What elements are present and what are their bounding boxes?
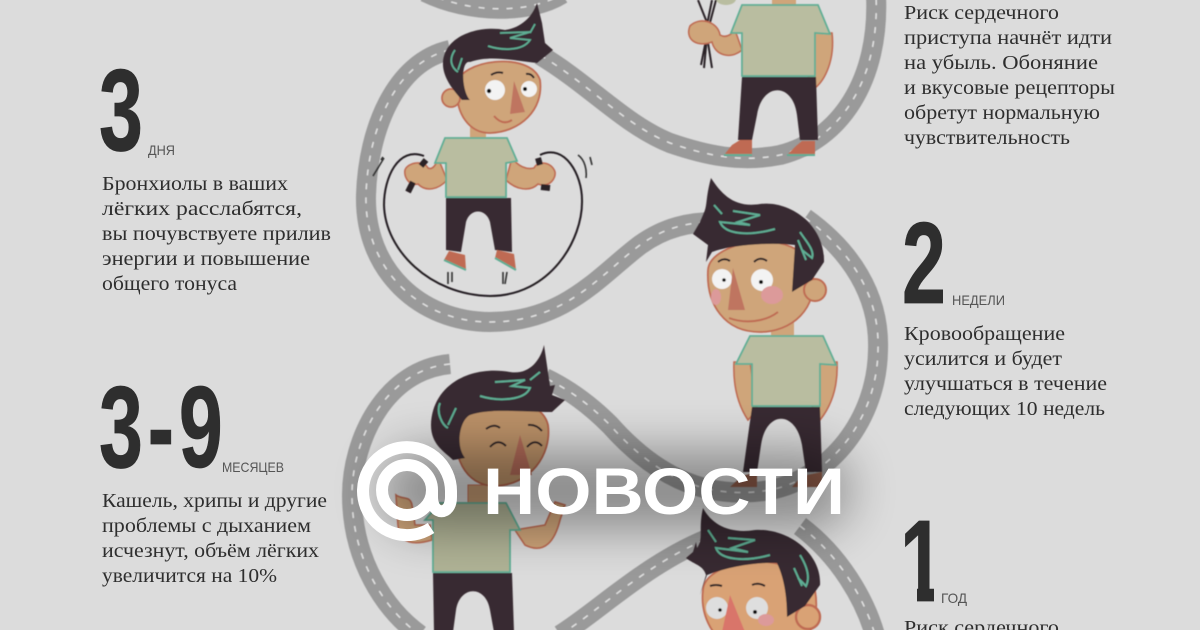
block: top right text: Риск сердечного <box>904 2 1059 24</box>
eyes <box>712 269 732 289</box>
head <box>703 562 816 630</box>
description: Кровообращение <box>904 323 1065 345</box>
shoes <box>724 140 815 155</box>
block: top right text: и вкусовые рецепторы <box>904 77 1115 99</box>
nose and mouth <box>510 81 525 114</box>
neck <box>470 125 486 145</box>
unit: НЕДЕЛИ <box>952 292 1005 308</box>
rope handles <box>408 158 550 192</box>
description <box>102 173 331 295</box>
block: 3-9 months <box>99 363 327 587</box>
head <box>457 61 540 133</box>
neck <box>468 485 490 507</box>
pants <box>433 573 514 630</box>
block: top right text <box>904 2 1115 149</box>
number 1: 1 <box>900 497 944 627</box>
block: top right text: на убыль. Обоняние <box>904 52 1098 74</box>
closed eyes <box>486 425 542 447</box>
right arm <box>808 33 833 88</box>
character: holding balloons <box>689 0 833 155</box>
unit: МЕСЯЦЕВ <box>222 459 284 475</box>
nose <box>722 595 745 630</box>
hair <box>693 178 824 292</box>
number 2: 2 <box>902 199 946 329</box>
balloon <box>716 0 736 5</box>
shirt <box>435 138 517 197</box>
block: top right text: чувствительность <box>904 127 1070 149</box>
hair <box>443 3 553 100</box>
icon: at sign <box>363 447 451 535</box>
cheek <box>758 614 774 626</box>
shirt <box>731 5 830 76</box>
character: one year <box>686 508 820 630</box>
description <box>904 323 1107 420</box>
arms <box>396 495 565 548</box>
eyes <box>706 597 728 619</box>
character: two weeks <box>693 178 837 487</box>
arms <box>734 362 837 420</box>
description: улучшаться в течение <box>904 373 1107 395</box>
description: усилится и будет <box>904 348 1062 370</box>
block: 2 weeks <box>902 199 1107 420</box>
nose and mouth <box>728 268 745 310</box>
block: top right text: обретут нормальную <box>904 102 1100 124</box>
description: лёгких расслабятся, <box>102 198 302 220</box>
shoes <box>444 250 516 270</box>
number 3-9: 3-9 <box>99 363 223 493</box>
neck <box>772 0 796 14</box>
description: Бронхиолы в ваших <box>102 173 288 195</box>
block: 1 year <box>904 520 1058 630</box>
nose <box>510 435 532 475</box>
arms and fists <box>405 158 555 189</box>
hair <box>686 508 820 617</box>
description: вы почувствуете прилив <box>102 223 331 245</box>
head <box>456 400 548 486</box>
neck <box>771 322 794 342</box>
jump rope <box>384 152 582 296</box>
description <box>102 490 327 587</box>
block: 3 days <box>99 46 331 295</box>
description: проблемы с дыханием <box>102 515 311 537</box>
description: энергии и повышение <box>102 248 310 270</box>
shirt <box>425 503 520 572</box>
description: следующих 10 недель <box>904 398 1105 420</box>
number 3: 3 <box>99 46 143 176</box>
motion marks <box>373 155 592 284</box>
head <box>708 242 813 332</box>
pants <box>738 77 818 140</box>
character: three to nine months <box>396 345 565 630</box>
description: исчезнут, объём лёгких <box>102 540 319 562</box>
unit: ДНЯ <box>148 142 175 158</box>
logo shadow <box>380 450 850 530</box>
winding road <box>352 0 878 630</box>
description: общего тонуса <box>102 273 237 295</box>
unit: ГОД <box>941 590 968 606</box>
logo: Новости <box>363 447 845 535</box>
shoes <box>730 472 822 487</box>
ear <box>804 279 826 301</box>
wordmark: НОВОСТИ <box>483 454 845 528</box>
description: Кашель, хрипы и другие <box>102 490 327 512</box>
pants <box>743 407 822 472</box>
balloon strings and hand <box>698 0 716 68</box>
ear <box>442 89 460 107</box>
pants <box>446 198 512 252</box>
block: top right text: приступа начнёт идти <box>904 27 1112 49</box>
description: увеличится на 10% <box>102 565 277 587</box>
eyes <box>485 80 505 100</box>
cheeks <box>761 286 783 304</box>
ear <box>796 605 820 629</box>
hair <box>431 345 565 460</box>
character: jumping rope <box>373 3 592 296</box>
shirt <box>736 336 836 406</box>
